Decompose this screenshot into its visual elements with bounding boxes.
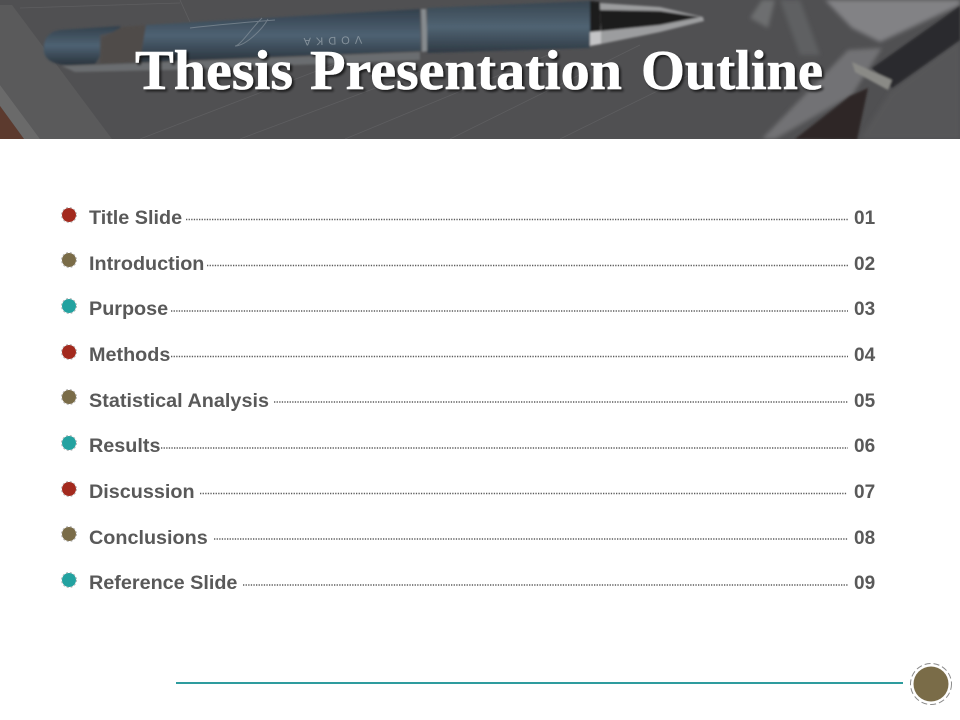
footer circle badge bbox=[910, 664, 952, 704]
title: Thesis bbox=[135, 40, 293, 102]
row: Methods: Methods bbox=[89, 344, 170, 366]
row: Introduction: Introduction bbox=[89, 253, 204, 275]
row: Conclusions bbox=[62, 526, 875, 549]
row: Purpose bbox=[62, 298, 875, 320]
row: Purpose: 03 bbox=[854, 299, 875, 320]
header banner: pen on notebook photo: VODKA bbox=[298, 33, 362, 47]
row: Title Slide: 01 bbox=[854, 208, 876, 229]
row: Methods bbox=[62, 344, 876, 366]
title bbox=[135, 40, 823, 102]
row: Discussion: Discussion bbox=[89, 481, 195, 503]
header banner: pen on notebook photo bbox=[0, 0, 960, 140]
footer teal line bbox=[176, 682, 903, 684]
row: Purpose: Purpose bbox=[89, 298, 168, 320]
row: Statistical Analysis: 05 bbox=[854, 391, 876, 412]
row: Results: Results bbox=[89, 435, 160, 457]
row: Introduction bbox=[62, 252, 875, 275]
title: Presentation bbox=[310, 40, 622, 102]
row: Introduction: 02 bbox=[854, 254, 875, 275]
row: Discussion bbox=[62, 481, 875, 503]
row: Statistical Analysis bbox=[62, 390, 876, 412]
row: Title Slide: Title Slide bbox=[89, 207, 182, 229]
row: Conclusions: Conclusions bbox=[89, 527, 208, 549]
row: Title Slide bbox=[62, 207, 876, 229]
row: Results bbox=[62, 435, 875, 457]
row: Methods: 04 bbox=[854, 345, 876, 366]
row: Reference Slide bbox=[62, 572, 875, 594]
row: Conclusions: 08 bbox=[854, 528, 875, 549]
row: Reference Slide: 09 bbox=[854, 573, 875, 594]
row: Statistical Analysis: Statistical Analysis bbox=[89, 390, 269, 412]
row: Reference Slide: Reference Slide bbox=[89, 572, 237, 594]
row: Results: 06 bbox=[854, 436, 875, 457]
row: Discussion: 07 bbox=[854, 482, 875, 503]
title: Outline bbox=[641, 40, 823, 102]
